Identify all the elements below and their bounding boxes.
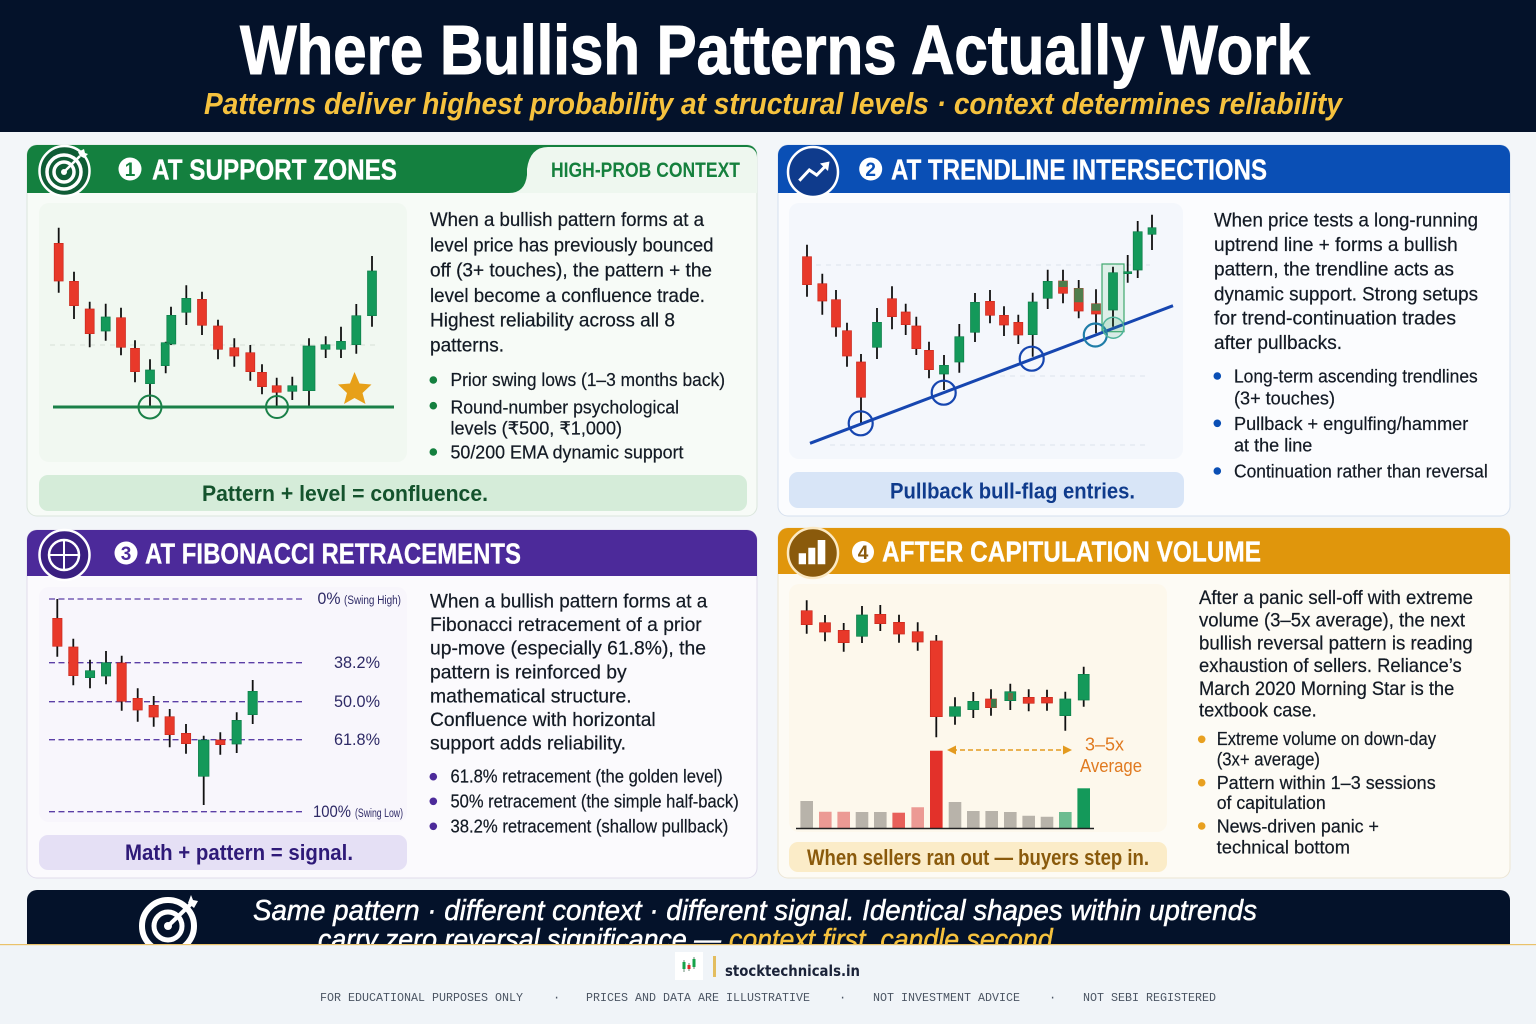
panel: after capitulation volume <box>778 528 1510 878</box>
panel 2 bullets: Continuation rather than reversal <box>1234 461 1488 481</box>
support zone candlestick chart <box>39 203 407 462</box>
fibonacci level labels: 0% <box>318 589 340 608</box>
panel 2 takeaway strip: Pullback bull-flag entries. <box>890 478 1135 503</box>
volume multiple label: 3–5x <box>1085 735 1124 755</box>
panel 2 body text: after pullbacks. <box>1214 332 1342 354</box>
disclaimer line: · <box>839 991 846 1005</box>
panel 1 body text <box>430 209 714 357</box>
panel 4 bullets: (3x+ average) <box>1217 750 1320 770</box>
disclaimer line: · <box>1049 991 1056 1005</box>
fibonacci level labels: 100% <box>313 802 351 821</box>
panel 4 body text: After a panic sell-off with extreme <box>1199 587 1473 609</box>
icon: site logo <box>675 952 703 980</box>
panel 1 body text: level price has previously bounced <box>430 234 714 256</box>
subtitle: Patterns deliver highest probability at structural levels · context determines reliability <box>204 86 1344 121</box>
panel 3 takeaway strip <box>39 835 407 870</box>
panel 4 body text: exhaustion of sellers. Reliance’s <box>1199 655 1462 677</box>
panel 2 body text <box>1214 210 1478 354</box>
panel 4 heading: 4 <box>858 543 869 564</box>
panel 2 body text: pattern, the trendline acts as <box>1214 258 1454 280</box>
panel 2 bullets: at the line <box>1234 436 1312 456</box>
panel 3 bullets <box>430 766 739 836</box>
panel 3 bullets: 38.2% retracement (shallow pullback) <box>450 816 728 836</box>
disclaimer line: NOT INVESTMENT ADVICE <box>873 991 1020 1005</box>
panel 3 takeaway strip: Math + pattern = signal. <box>125 840 353 865</box>
panel 4 bullets: Pattern within 1–3 sessions <box>1217 773 1436 793</box>
panel 1 heading: AT SUPPORT ZONES <box>152 154 397 186</box>
panel 3 body text: up-move (especially 61.8%), the <box>430 637 706 659</box>
volume multiple label <box>1080 735 1142 776</box>
panel 1 takeaway strip <box>39 475 747 511</box>
panel 1 body text: off (3+ touches), the pattern + the <box>430 260 712 282</box>
panel 2 body text: for trend-continuation trades <box>1214 307 1456 329</box>
panel 2 header bar <box>778 145 1510 193</box>
panel 2 body text: uptrend line + forms a bullish <box>1214 234 1458 256</box>
arrow: volume span <box>947 746 1072 754</box>
panel 2 bullets <box>1214 366 1488 481</box>
banner message: context first, candle second. <box>729 924 1060 956</box>
panel 3 bullets: 61.8% retracement (the golden level) <box>450 766 723 786</box>
panel 3 body text: pattern is reinforced by <box>430 661 627 683</box>
panel 1 body text: patterns. <box>430 335 504 357</box>
panel 3 body text: support adds reliability. <box>430 732 626 754</box>
panel 3 body text: Fibonacci retracement of a prior <box>430 614 702 636</box>
panel 4 bullets: of capitulation <box>1217 793 1326 813</box>
panel 4 bullets: technical bottom <box>1217 837 1350 857</box>
panel 4 bullets: News-driven panic + <box>1217 816 1379 836</box>
panel 1 body text: When a bullish pattern forms at a <box>430 209 704 231</box>
fibonacci level labels: (Swing High) <box>344 595 401 607</box>
bottom callout banner <box>27 890 1510 956</box>
panel 4 bullets: Extreme volume on down-day <box>1217 729 1436 749</box>
panel 2 heading: 2 <box>865 160 876 181</box>
panel 3 heading: 3 <box>121 544 131 565</box>
icon: volume bars <box>788 528 838 578</box>
touch circles <box>138 396 288 418</box>
panel 4 bullets <box>1198 729 1436 857</box>
panel 2 body text: dynamic support. Strong setups <box>1214 283 1478 305</box>
panel 3 body text: mathematical structure. <box>430 685 632 707</box>
ascending trendline <box>810 306 1173 443</box>
trendline candlestick chart <box>789 203 1183 459</box>
panel 1 body text: level become a confluence trade. <box>430 285 705 307</box>
support line <box>53 406 394 408</box>
icon: fibonacci circle <box>40 530 90 580</box>
site name: stocktechnicals.in <box>725 962 860 980</box>
panel 3 heading: AT FIBONACCI RETRACEMENTS <box>145 538 521 570</box>
panel: at support zones <box>27 145 757 516</box>
disclaimer line: · <box>553 991 560 1005</box>
fibonacci level labels <box>313 589 403 821</box>
banner message: carry zero reversal significance — <box>318 924 722 956</box>
panel 2 bullets: Long-term ascending trendlines <box>1234 366 1478 386</box>
disclaimer line: PRICES AND DATA ARE ILLUSTRATIVE <box>586 991 810 1005</box>
panel 1 bullets: Prior swing lows (1–3 months back) <box>450 370 725 390</box>
fibonacci level labels: (Swing Low) <box>355 808 403 820</box>
disclaimer line: FOR EDUCATIONAL PURPOSES ONLY <box>320 991 523 1005</box>
panel 1 bullets <box>430 370 725 462</box>
panel 2 takeaway strip <box>789 472 1184 508</box>
icon: rising trend <box>788 147 838 197</box>
panel 1 header bar <box>27 145 757 193</box>
panel: at fibonacci retracements <box>27 530 757 878</box>
banner message <box>253 895 1257 956</box>
panel 1 heading: 1 <box>125 160 136 181</box>
panel 2 bullets: (3+ touches) <box>1234 388 1335 408</box>
panel 1 bullets: Round-number psychological <box>450 397 679 417</box>
fibonacci level labels: 50.0% <box>334 692 380 711</box>
fibonacci candlestick chart <box>39 587 407 822</box>
fibonacci level labels: 38.2% <box>334 653 380 672</box>
fibonacci level labels: 61.8% <box>334 730 380 749</box>
panel 1 body text: Highest reliability across all 8 <box>430 310 675 332</box>
volume bars <box>796 751 1094 828</box>
panel 2 body text: When price tests a long-running <box>1214 210 1478 232</box>
panel 3 header bar <box>27 530 757 576</box>
panel 4 header bar <box>778 528 1510 574</box>
capitulation candlestick and volume chart <box>789 584 1167 832</box>
panel 1 bullets: levels (₹500, ₹1,000) <box>450 418 622 438</box>
header banner <box>0 0 1536 132</box>
panel 4 body text: bullish reversal pattern is reading <box>1199 632 1473 654</box>
panel 4 heading: AFTER CAPITULATION VOLUME <box>882 536 1261 568</box>
title: Where Bullish Patterns Actually Work <box>240 11 1310 89</box>
volume multiple label: Average <box>1080 756 1142 776</box>
panel 3 body text <box>430 590 707 754</box>
panel 2 bullets: Pullback + engulfing/hammer <box>1234 414 1468 434</box>
panel 4 body text: March 2020 Morning Star is the <box>1199 678 1454 700</box>
touch circles <box>849 324 1107 435</box>
context tab: HIGH-PROB CONTEXT <box>551 159 740 182</box>
disclaimer line <box>320 991 1216 1005</box>
icon: star <box>338 372 372 404</box>
panel 3 body text: Confluence with horizontal <box>430 709 656 731</box>
panel 4 body text <box>1199 587 1473 722</box>
panel 3 body text: When a bullish pattern forms at a <box>430 590 707 612</box>
disclaimer line: NOT SEBI REGISTERED <box>1083 991 1216 1005</box>
panel 4 body text: volume (3–5x average), the next <box>1199 610 1466 632</box>
panel 1 bullets: 50/200 EMA dynamic support <box>450 442 684 462</box>
panel: at trendline intersections <box>778 145 1510 516</box>
panel 1 takeaway strip: Pattern + level = confluence. <box>202 481 488 506</box>
panel 4 takeaway strip: When sellers ran out — buyers step in. <box>807 845 1149 870</box>
banner message: Same pattern · different context · different signal. Identical shapes within uptrends <box>253 895 1257 927</box>
icon: banner target <box>142 895 198 952</box>
panel 4 body text: textbook case. <box>1199 700 1317 722</box>
panel 3 bullets: 50% retracement (the simple half-back) <box>450 792 739 812</box>
footer <box>0 944 1536 1024</box>
icon: target <box>40 146 90 196</box>
highlighted pullback box <box>1102 264 1124 332</box>
context tab <box>509 147 757 193</box>
panel 2 heading: AT TRENDLINE INTERSECTIONS <box>891 154 1267 186</box>
